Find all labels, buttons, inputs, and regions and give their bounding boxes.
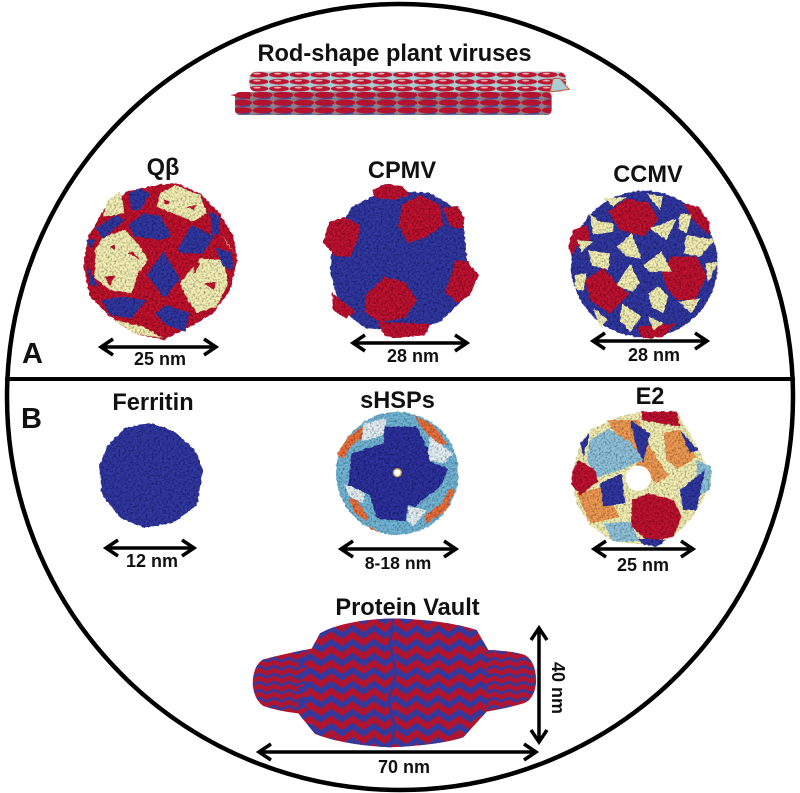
arrow: vault 70 nm (259, 744, 536, 760)
label: 8-18 nm: 8-18 nm (365, 553, 431, 573)
section label A: A (22, 338, 43, 370)
arrow: sHSPs 8-18 nm (341, 541, 456, 557)
particle: Qβ (83, 183, 237, 340)
arrow: CPMV 28 nm (353, 335, 467, 351)
heading: E2: E2 (636, 384, 664, 410)
icon: rod-shape virus (230, 72, 569, 115)
label: 70 nm: 70 nm (378, 757, 430, 777)
particle: CPMV (323, 184, 479, 338)
divider between sections A and B (5, 377, 795, 381)
heading: CCMV: CCMV (613, 162, 683, 188)
particle: E2 (572, 412, 713, 547)
heading: rod-shape plant viruses: Rod-shape plant viruses (257, 41, 532, 67)
label: E2 25 nm: 25 nm (617, 555, 669, 575)
label: 40 nm: 40 nm (548, 662, 568, 714)
particle: sHSPs (336, 412, 459, 535)
arrow: Qβ 25 nm (101, 339, 216, 355)
arrow: E2 25 nm (594, 541, 693, 557)
label: 12 nm: 12 nm (126, 551, 178, 571)
arrow: Ferritin 12 nm (106, 540, 194, 556)
arrow: vault 40 nm (531, 628, 547, 742)
label: CPMV 28 nm: 28 nm (387, 346, 439, 366)
arrow: CCMV 28 nm (593, 333, 707, 349)
section label B: B (21, 403, 42, 435)
heading: sHSPs: sHSPs (360, 388, 435, 414)
particle: Ferritin (99, 423, 203, 528)
particle: Protein Vault (250, 617, 540, 750)
heading: Protein Vault: Protein Vault (335, 595, 480, 621)
label: CCMV 28 nm: 28 nm (628, 345, 680, 365)
label: 25 nm: 25 nm (134, 349, 186, 369)
particle: CCMV (568, 191, 718, 338)
heading: Ferritin: Ferritin (112, 390, 194, 416)
heading: Qβ: Qβ (147, 155, 179, 181)
heading: CPMV: CPMV (368, 158, 436, 184)
